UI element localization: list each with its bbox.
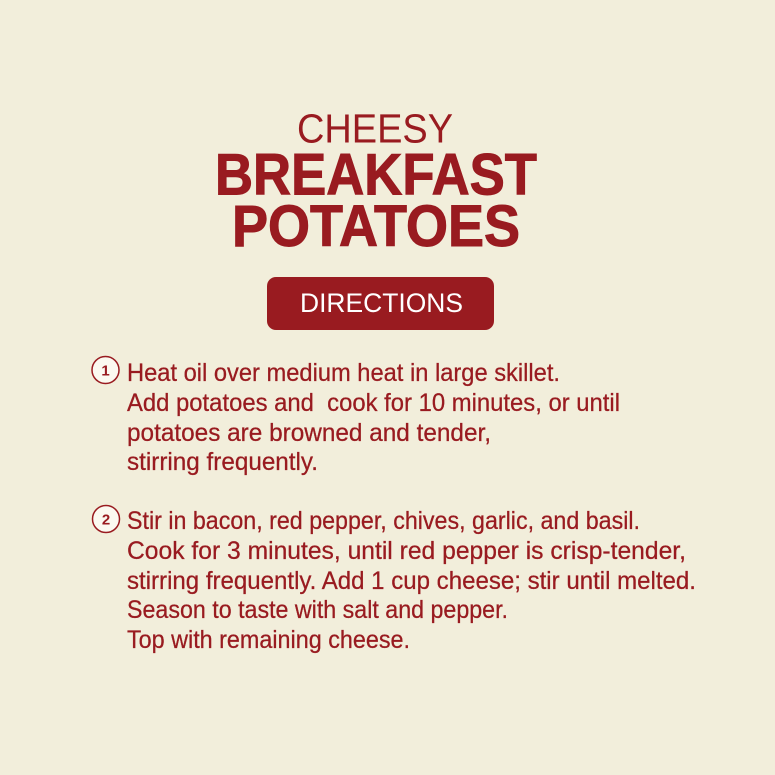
icon: number 1: 1 bbox=[101, 362, 110, 380]
title: CHEESY bbox=[297, 106, 453, 152]
title: POTATOES bbox=[232, 194, 520, 259]
step 2 text bbox=[127, 507, 696, 654]
icon: number 2: 2 bbox=[102, 512, 110, 528]
step 1 text bbox=[127, 359, 620, 476]
step 1 text: potatoes are browned and tender, bbox=[127, 419, 491, 447]
icon: number 1 bbox=[92, 356, 119, 384]
icon: number 2 bbox=[92, 506, 120, 532]
directions badge: DIRECTIONS bbox=[300, 288, 463, 318]
step 2 bbox=[92, 506, 696, 654]
step 1 text: Heat oil over medium heat in large skillet. bbox=[127, 359, 560, 387]
step 1 bbox=[92, 356, 620, 476]
step 2 text: Cook for 3 minutes, until red pepper is crisp-tender, bbox=[127, 537, 686, 565]
directions badge bbox=[267, 277, 494, 330]
step 2 text: stirring frequently. Add 1 cup cheese; stir until melted. bbox=[127, 567, 696, 595]
title bbox=[215, 106, 537, 259]
step 2 text: Top with remaining cheese. bbox=[127, 626, 410, 654]
step 2 text: Season to taste with salt and pepper. bbox=[127, 596, 508, 624]
title: BREAKFAST bbox=[215, 142, 537, 208]
step 2 text: Stir in bacon, red pepper, chives, garlic, and basil. bbox=[127, 507, 640, 535]
step 1 text: Add potatoes and cook for 10 minutes, or until bbox=[127, 389, 620, 417]
step 1 text: stirring frequently. bbox=[127, 448, 318, 476]
